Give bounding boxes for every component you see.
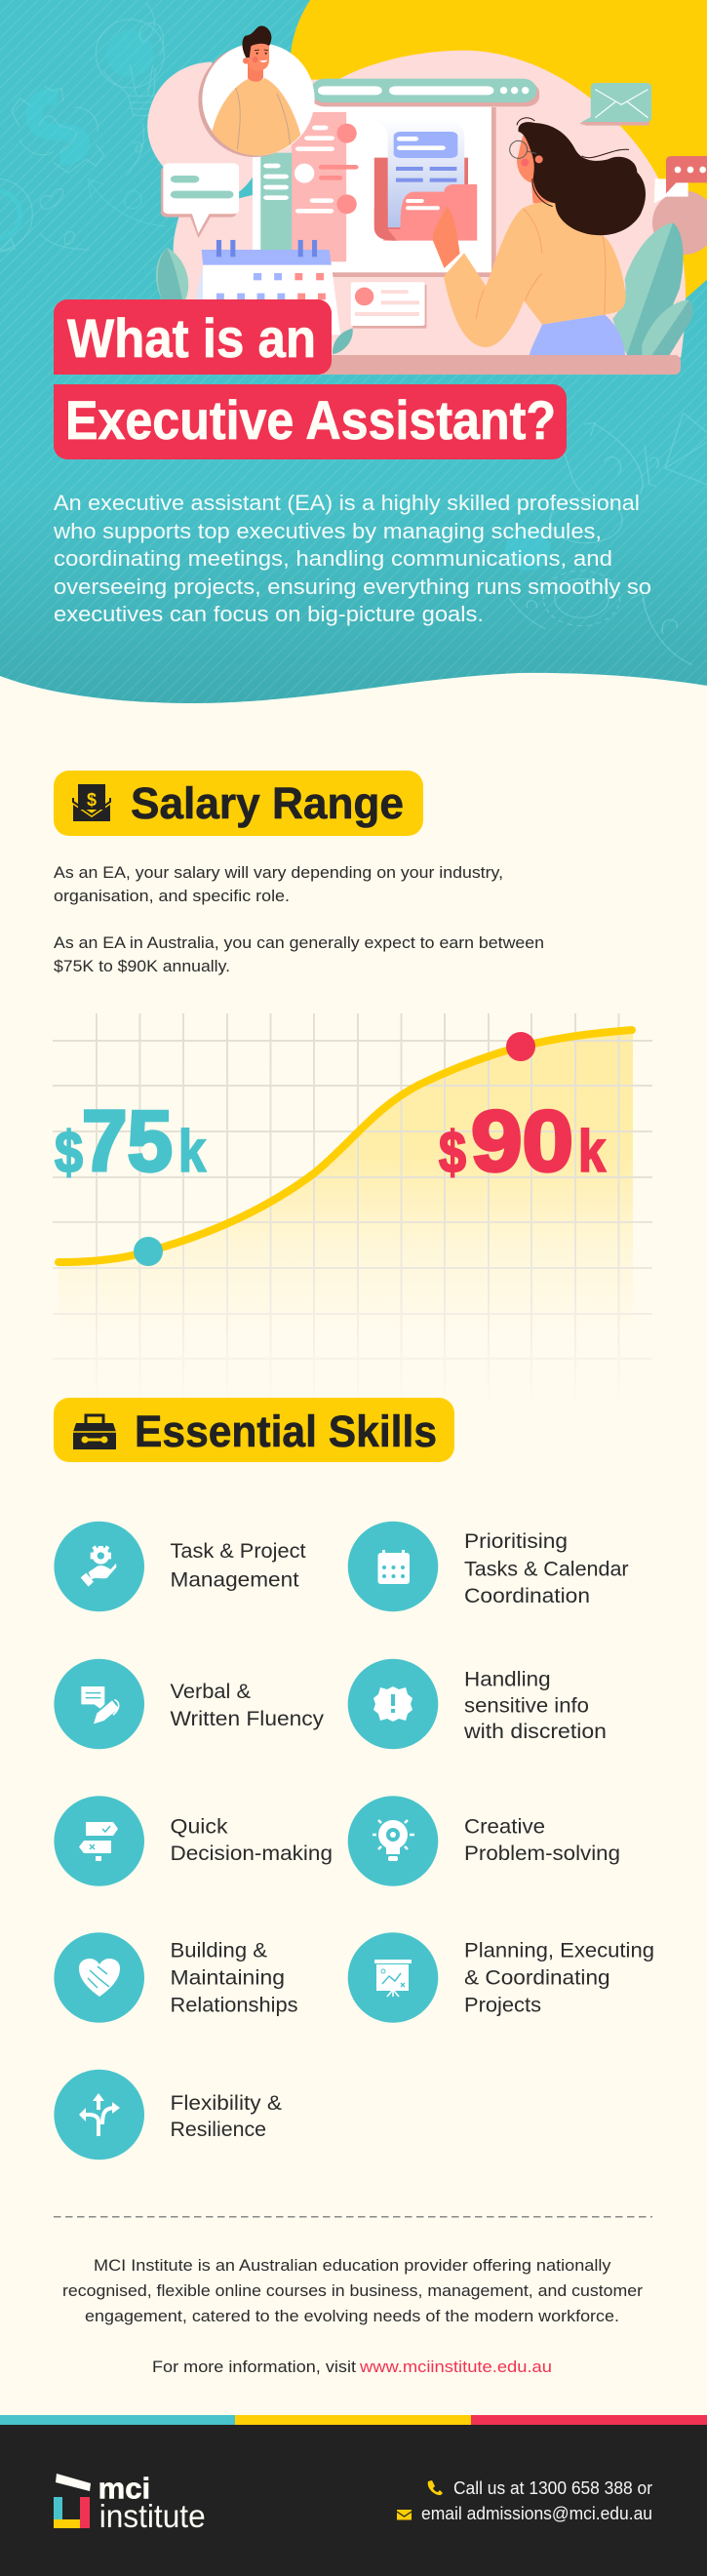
heading: Essential Skills — [54, 1398, 454, 1462]
title — [54, 299, 567, 459]
title box: What is an: What is an — [67, 307, 316, 369]
icon: split arrows — [79, 2093, 120, 2136]
envelope bubble — [579, 83, 651, 126]
title box: Executive Assistant?: Executive Assistant? — [65, 389, 556, 451]
label: $75k: 75 — [82, 1092, 173, 1189]
left chat bubble — [161, 163, 239, 238]
small leaf by title — [333, 329, 353, 354]
logo: mci institute — [54, 2472, 206, 2534]
about MCI Institute text — [62, 2256, 643, 2376]
colour stripe — [0, 2415, 707, 2425]
label: $90k: k — [578, 1119, 607, 1184]
skill: Handling sensitive info with discretion: sensitive info — [464, 1695, 589, 1717]
pink backdrop blob — [147, 51, 686, 358]
label: $75k: $ — [55, 1120, 83, 1185]
skill: Creative Problem-solving — [348, 1796, 620, 1886]
skill: Prioritising Tasks and Calendar Coordination: Prioritising — [464, 1530, 568, 1553]
about MCI Institute text: For more information, visit — [152, 2358, 356, 2376]
content columns — [239, 112, 359, 261]
skill: Handling sensitive info with discretion: with discretion — [463, 1721, 607, 1743]
about MCI Institute text: www.mciinstitute.edu.au — [359, 2358, 552, 2376]
calendar — [195, 240, 340, 335]
icon: chat and pen — [81, 1686, 119, 1724]
label: $90k: $ — [439, 1120, 466, 1185]
label: $75k: k — [178, 1119, 207, 1184]
contact: email: email admissions@mci.edu.au — [421, 2504, 652, 2523]
skill: Task and Project Management — [54, 1522, 306, 1611]
skill: Flexibility and Resilience: Flexibility & — [170, 2092, 282, 2115]
intro paragraph: coordinating meetings, handling communications, and — [54, 546, 612, 571]
hand — [433, 207, 460, 268]
skill: Verbal and Written Fluency: Written Fluency — [170, 1708, 325, 1730]
icon: toolbox — [73, 1415, 116, 1449]
salary description — [54, 863, 544, 975]
skill: Task and Project Management: Task & Project — [170, 1540, 306, 1563]
icon: heart handshake — [79, 1959, 120, 1997]
salary description: $75K to $90K annually. — [54, 957, 230, 975]
contact: phone: Call us at 1300 658 388 or — [453, 2478, 652, 2498]
intro paragraph: who supports top executives by managing schedules, — [53, 519, 602, 543]
skill: Flexibility and Resilience — [54, 2070, 282, 2160]
skill: Quick Decision-making: Decision-making — [170, 1843, 333, 1865]
heading: Salary Range: Salary Range — [131, 778, 404, 828]
desk — [312, 355, 681, 375]
woman figure — [433, 118, 646, 355]
point: high salary — [506, 1032, 535, 1061]
background doodles — [0, 3, 166, 252]
skill: Planning, Executing and Coordinating Projects: Planning, Executing — [464, 1939, 654, 1962]
skill: Prioritising Tasks and Calendar Coordination — [348, 1522, 629, 1611]
label: $90k: 90 — [471, 1092, 573, 1189]
salary curve — [59, 1030, 632, 1262]
logo: mci institute: institute — [99, 2498, 206, 2534]
browser window — [311, 79, 539, 277]
salary description: organisation, and specific role. — [54, 887, 290, 905]
skill: Verbal and Written Fluency — [54, 1659, 325, 1749]
chart grid — [53, 1013, 652, 1409]
intro paragraph — [53, 491, 651, 626]
skill: Quick Decision-making — [54, 1796, 333, 1886]
skill: Creative Problem-solving: Problem-solving — [464, 1843, 620, 1865]
icon: mail — [397, 2510, 412, 2520]
heading: Salary Range — [54, 771, 423, 836]
skill: Task and Project Management: Management — [170, 1568, 299, 1592]
point: low salary — [134, 1237, 163, 1266]
skill: Planning, Executing and Coordinating Projects — [348, 1932, 654, 2023]
label: $75k — [55, 1092, 207, 1189]
logo: mci institute: mci — [98, 2472, 150, 2506]
skill: Creative Problem-solving: Creative — [464, 1816, 545, 1839]
folder and document — [361, 119, 477, 241]
right chat bubbles and circle — [652, 156, 707, 255]
icon: light bulb — [373, 1820, 414, 1861]
icon: alert badge — [373, 1686, 412, 1722]
intro paragraph: overseeing projects, ensuring everything runs smoothly so — [54, 575, 651, 599]
left leaf — [156, 248, 188, 300]
salary description: As an EA in Australia, you can generally expect to earn between — [54, 933, 544, 952]
skill: Quick Decision-making: Quick — [170, 1816, 228, 1839]
about MCI Institute text: recognised, flexible online courses in business, management, and customer — [62, 2281, 643, 2300]
skill: Building and Maintaining Relationships: Relationships — [170, 1994, 298, 2016]
about MCI Institute text: MCI Institute is an Australian education provider offering nationally — [94, 2256, 611, 2275]
skill: Prioritising Tasks and Calendar Coordination: Coordination — [464, 1585, 590, 1607]
skill: Handling sensitive info with discretion: Handling — [464, 1669, 551, 1691]
skill: Planning, Executing and Coordinating Projects: & Coordinating — [464, 1967, 610, 1990]
icon: gear in hand — [81, 1545, 117, 1587]
skill: Prioritising Tasks and Calendar Coordination: Tasks & Calendar — [464, 1559, 629, 1580]
label: $90k — [439, 1092, 607, 1189]
hero background: teal wave panel — [0, 0, 707, 703]
footer panel — [0, 2425, 707, 2576]
icon: signpost — [79, 1822, 118, 1861]
icon: salary envelope: $ — [87, 790, 97, 810]
icon: presentation board — [374, 1960, 412, 1997]
icon: calendar — [378, 1550, 410, 1584]
icon: phone — [428, 2480, 443, 2495]
skill: Planning, Executing and Coordinating Projects: Projects — [464, 1994, 541, 2016]
skill: Flexibility and Resilience: Resilience — [170, 2119, 266, 2141]
yellow backdrop blob — [291, 0, 707, 300]
salary line chart — [53, 1013, 652, 1409]
chart area fill — [59, 1030, 633, 1346]
hero illustration — [147, 0, 707, 375]
man portrait — [198, 26, 315, 157]
about MCI Institute text: engagement, catered to the evolving needs of the modern workforce. — [85, 2307, 619, 2325]
heading: Essential Skills: Essential Skills — [135, 1407, 437, 1456]
profile card — [351, 282, 426, 329]
skill: Building and Maintaining Relationships: Building & — [170, 1939, 267, 1962]
skill: Verbal and Written Fluency: Verbal & — [170, 1681, 251, 1703]
salary description: As an EA, your salary will vary depending on your industry, — [54, 863, 503, 882]
skill: Building and Maintaining Relationships — [54, 1932, 298, 2023]
icon: salary envelope — [73, 784, 110, 821]
intro paragraph: An executive assistant (EA) is a highly skilled professional — [54, 491, 640, 515]
lower right doodles — [505, 413, 707, 665]
skill: Building and Maintaining Relationships: Maintaining — [170, 1967, 285, 1990]
intro paragraph: executives can focus on big-picture goals. — [54, 602, 484, 626]
right leaves — [612, 222, 693, 355]
skill: Handling sensitive info with discretion — [348, 1659, 607, 1749]
